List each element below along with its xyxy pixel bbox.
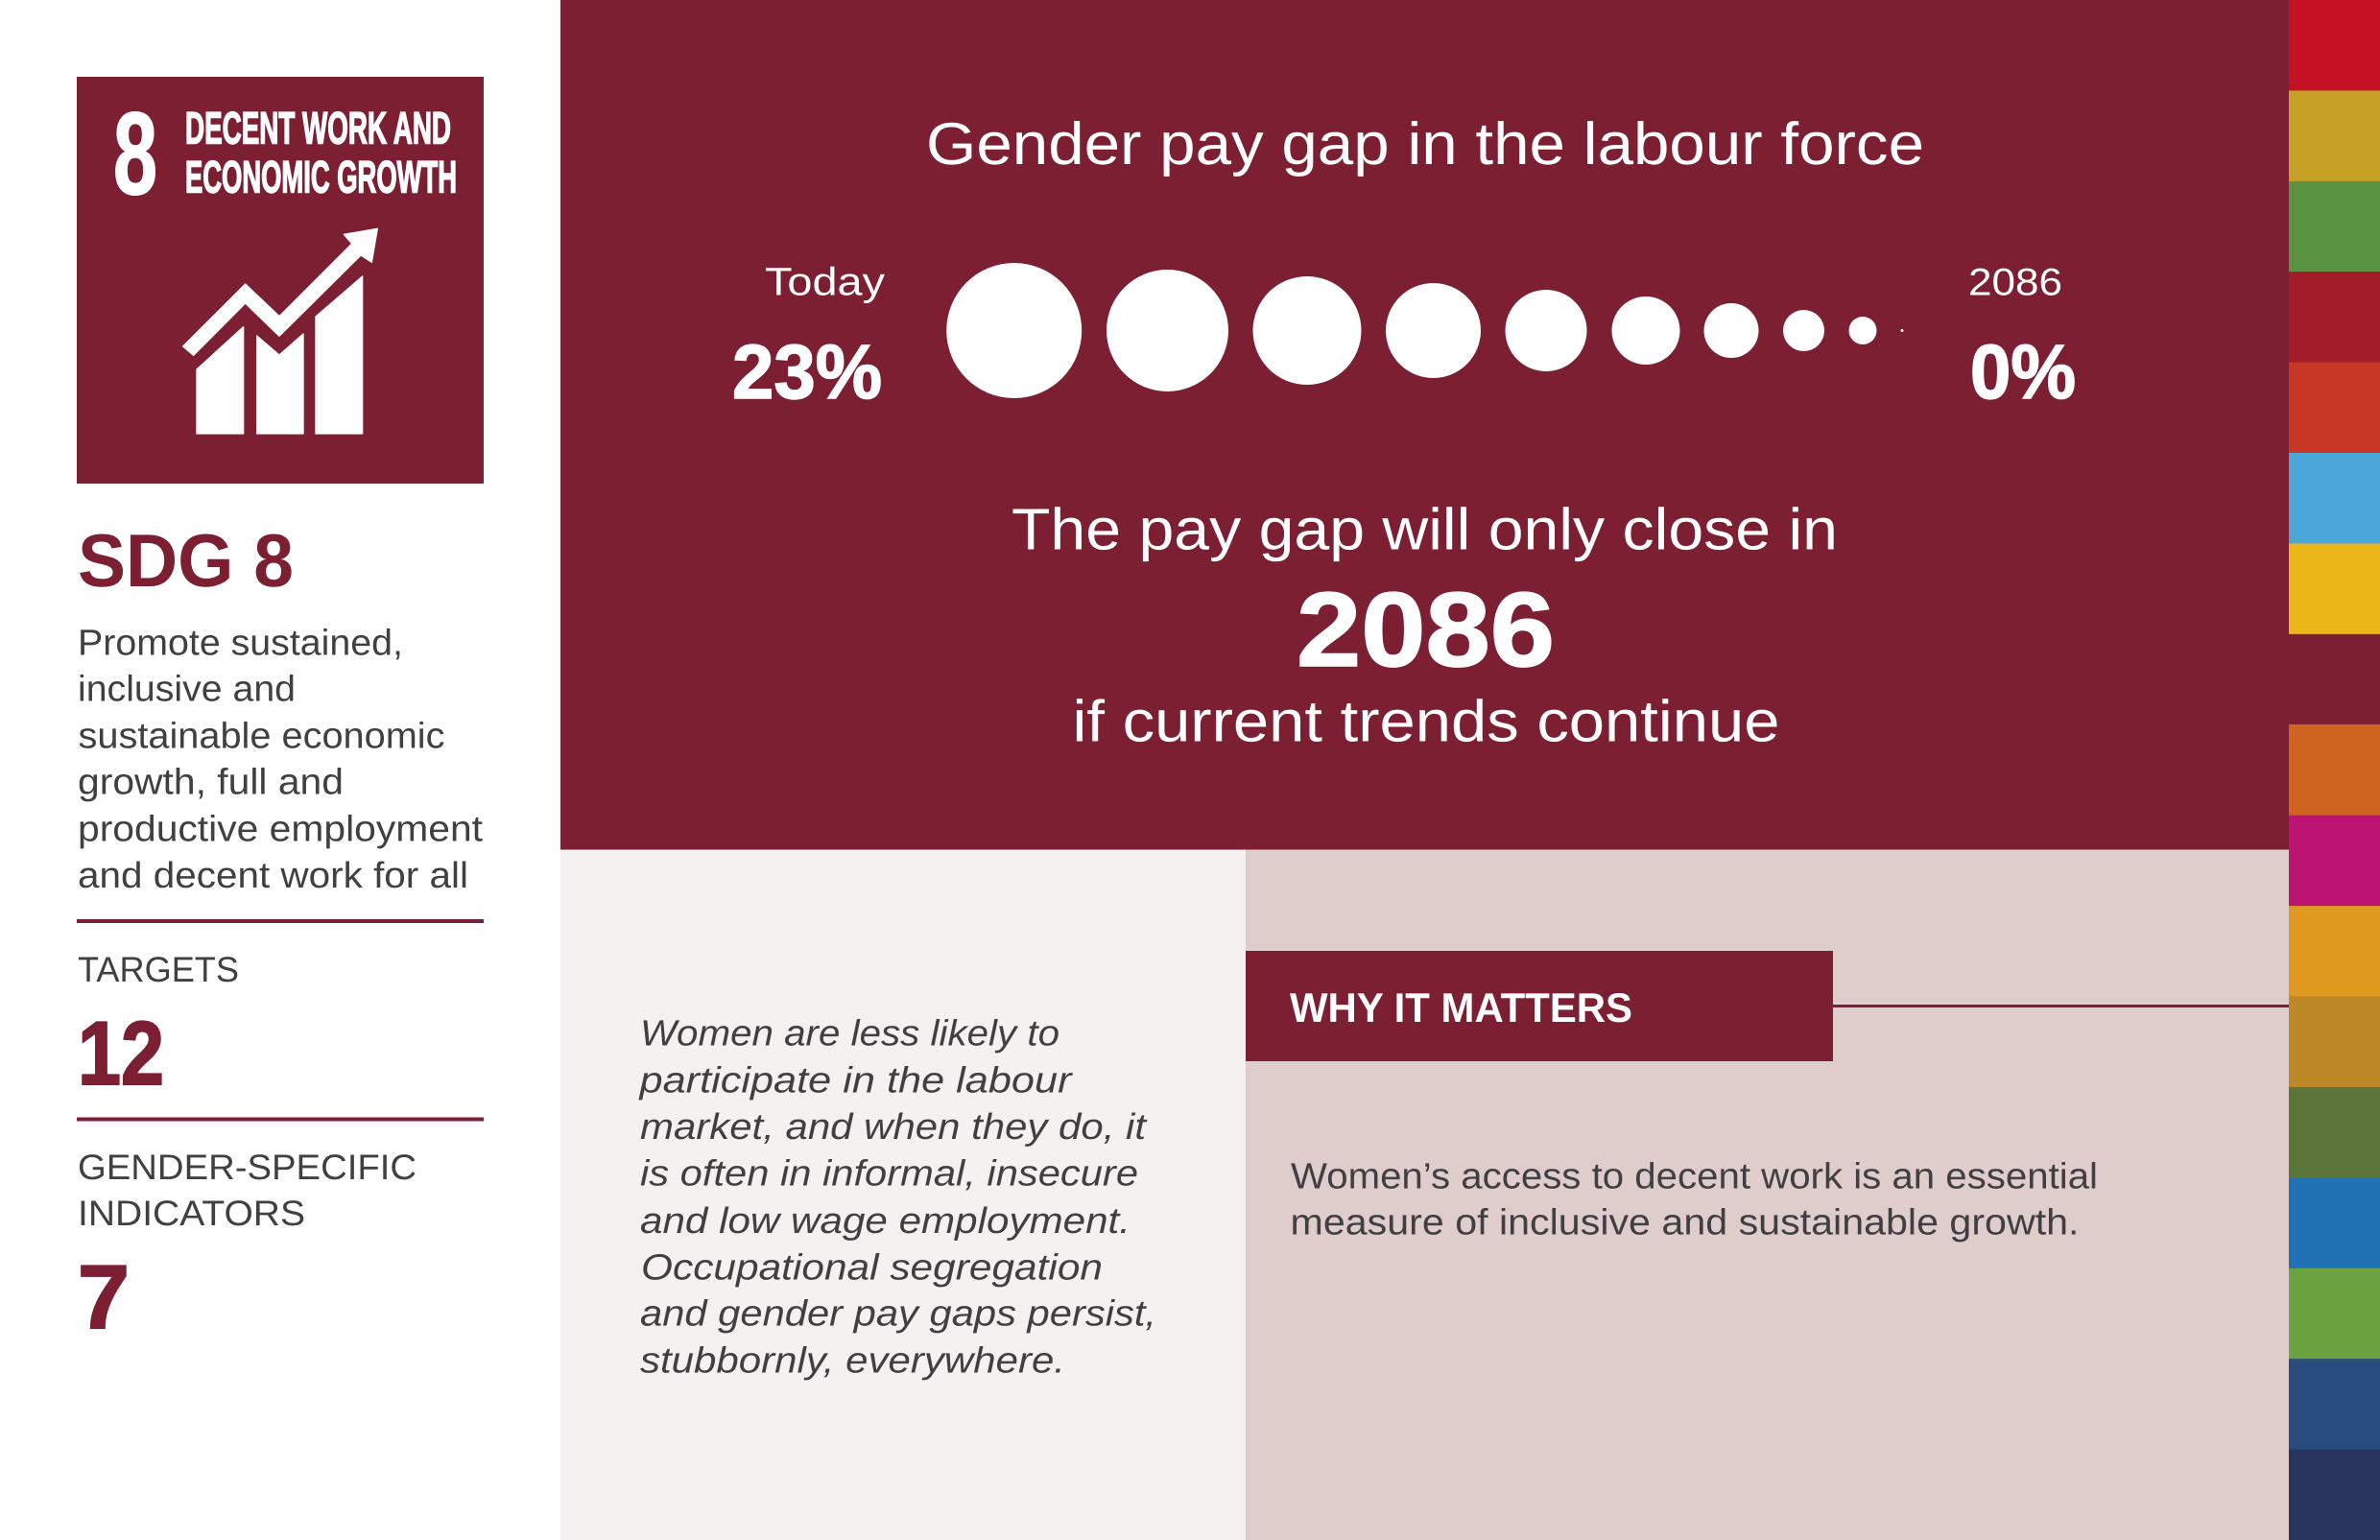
italic paragraph: stubbornly, everywhere. <box>640 1340 1065 1381</box>
goal description <box>78 624 483 896</box>
label: today: Today <box>765 259 886 303</box>
heading: SDG 8: SDG 8 <box>78 518 294 603</box>
heading box: why it matters <box>1246 951 1833 1061</box>
statement year: 2086: 2086 <box>1297 571 1555 689</box>
goal description: growth, full and <box>78 762 344 802</box>
statement: pay gap closes: The pay gap will only close in <box>1012 497 1838 562</box>
italic paragraph: is often in informal, insecure <box>640 1154 1138 1195</box>
value: 23%: 23% <box>732 329 882 415</box>
value: 0%: 0% <box>1970 329 2076 415</box>
goal description: inclusive and <box>78 670 296 710</box>
italic paragraph: Occupational segregation <box>641 1247 1103 1288</box>
SDG 8 badge <box>77 77 484 484</box>
italic paragraph: and low wage employment. <box>640 1201 1130 1242</box>
goal description: and decent work for all <box>78 856 468 896</box>
chart: shrinking circles <box>946 263 1904 398</box>
icon: rising chart with arrow <box>183 228 377 434</box>
gender-specific indicators label <box>78 1148 416 1233</box>
targets label: TARGETS <box>78 950 239 989</box>
badge title: DECENT WORK AND <box>185 102 451 154</box>
goal description: Promote sustained, <box>78 624 403 664</box>
statement ending: if current trends continue <box>1073 689 1779 754</box>
badge number: 8 <box>113 88 157 219</box>
SDG colour stripes <box>2289 0 2380 1540</box>
indicators value: 7 <box>78 1246 130 1347</box>
explanation text: measure of inclusive and sustainable growth. <box>1290 1203 2079 1244</box>
title: Gender pay gap in the labour force <box>926 111 1924 178</box>
explanation text <box>1290 1156 2098 1244</box>
gender-specific indicators label: INDICATORS <box>78 1194 305 1233</box>
italic paragraph: market, and when they do, it <box>640 1107 1148 1148</box>
italic paragraph <box>638 1013 1156 1381</box>
goal description: sustainable economic <box>79 716 445 756</box>
italic paragraph: and gender pay gaps persist, <box>640 1294 1156 1335</box>
goal description: productive employment <box>78 810 483 850</box>
badge title: ECONOMIC GROWTH <box>185 152 457 201</box>
explanation text: Women’s access to decent work is an essential <box>1291 1156 2098 1196</box>
panel: why it matters <box>1246 850 2289 1540</box>
panel: gender pay gap <box>560 0 2289 850</box>
targets value: 12 <box>78 1003 164 1103</box>
heading box: why it matters: WHY IT MATTERS <box>1290 985 1632 1031</box>
panel: context quote <box>560 850 1246 1540</box>
panel: sidebar <box>77 77 484 1347</box>
badge title <box>185 102 457 201</box>
italic paragraph: Women are less likely to <box>640 1013 1059 1054</box>
gender-specific indicators label: GENDER-SPECIFIC <box>78 1148 416 1187</box>
italic paragraph: participate in the labour <box>638 1061 1073 1102</box>
label: 2086: 2086 <box>1968 261 2062 303</box>
